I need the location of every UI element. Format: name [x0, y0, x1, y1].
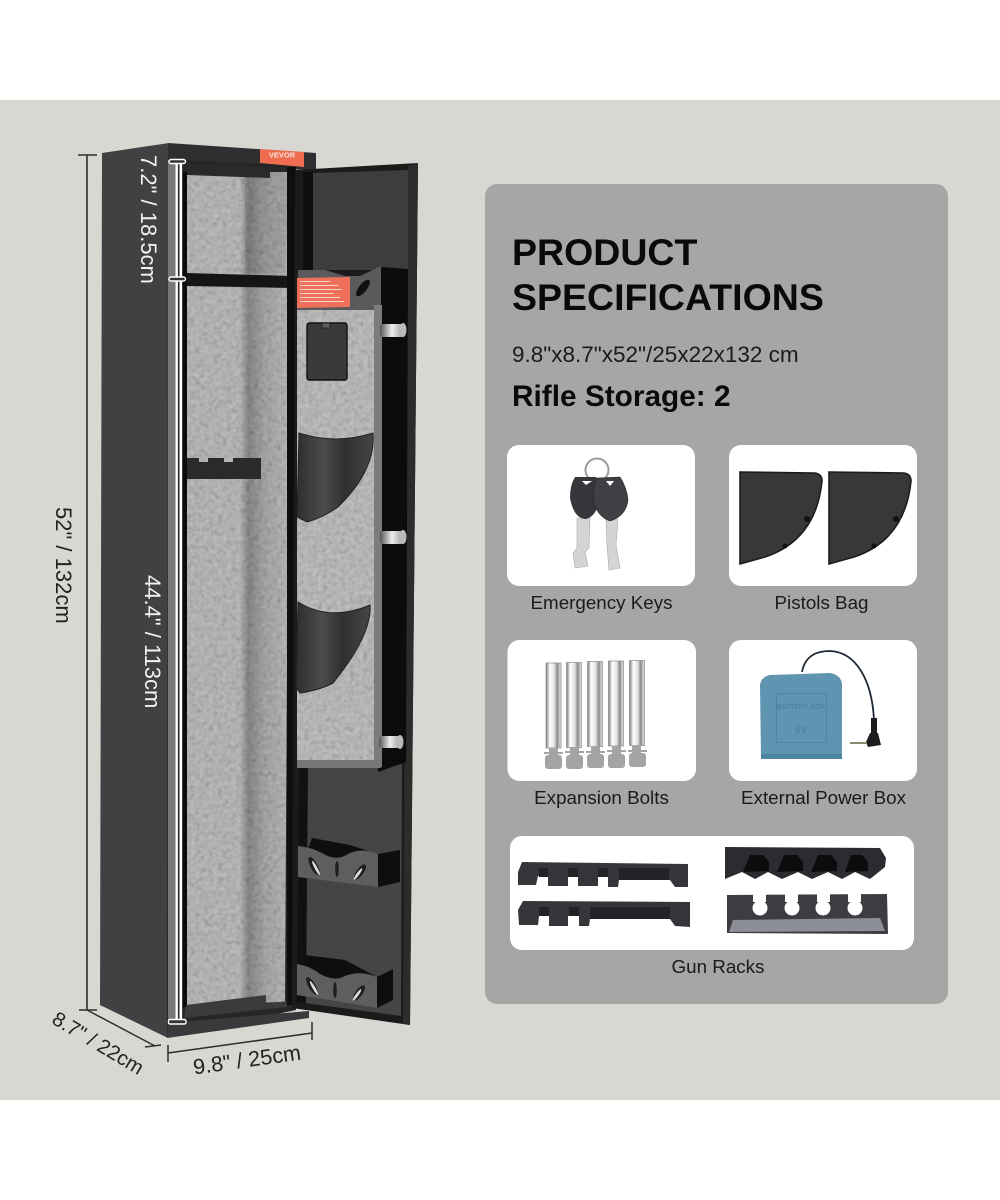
- icon: left racks: [518, 862, 690, 927]
- inner gun rack: [187, 458, 261, 479]
- white internal height bars: [168, 160, 186, 1024]
- dimension label: 52 inch: 52" / 132cm: [51, 507, 76, 624]
- label: Pistols Bag: [775, 592, 868, 613]
- pistols bag upper: [297, 433, 373, 522]
- door lower panel: [305, 764, 402, 1016]
- dimension label: 8.7 inch: 8.7" / 22cm: [48, 1008, 147, 1080]
- safe top front band: [168, 143, 316, 170]
- dimension label: 9.8 inch: 9.8" / 25cm: [191, 1040, 302, 1080]
- vent slot: [354, 278, 372, 298]
- icon: power box: [760, 651, 881, 759]
- card: pistols bag: [729, 445, 917, 613]
- icon: bolts: [544, 660, 647, 769]
- icon: keys: [570, 458, 628, 570]
- label: Expansion Bolts: [534, 787, 669, 808]
- open door: [292, 163, 418, 1025]
- base plate: [167, 1011, 309, 1038]
- pistols bag lower: [296, 602, 370, 693]
- bottom sill: [184, 995, 287, 1018]
- dimension: depth line: [87, 1010, 161, 1047]
- heading: PRODUCT: [512, 231, 698, 273]
- door gun holder lower: [297, 955, 393, 1008]
- orange VEVOR label: VEVOR: [269, 150, 296, 160]
- dimension: overall height line: [78, 155, 97, 1010]
- shelf: [187, 273, 291, 288]
- door bolts: [379, 323, 406, 749]
- panel: product specifications: [485, 184, 948, 1004]
- label: External Power Box: [741, 787, 907, 808]
- pistol panel right black box: [378, 267, 408, 772]
- pistol panel top: [297, 266, 381, 310]
- door gun holder upper: [298, 838, 400, 887]
- card: external power box: [729, 640, 917, 808]
- heading: [512, 231, 824, 318]
- icon: right racks: [725, 847, 888, 934]
- safe front frame: [167, 160, 296, 1038]
- top lip: [187, 164, 270, 178]
- door upper panel: [313, 170, 408, 270]
- icon: power box: 6V: [795, 725, 807, 736]
- rifle storage: Rifle Storage: 2: [512, 380, 731, 413]
- felt interior: [186, 172, 290, 1005]
- icon: bag pair: [740, 472, 911, 564]
- interior door-side edge: [287, 167, 296, 1005]
- felt door panel: [297, 310, 374, 761]
- label: Emergency Keys: [531, 592, 672, 613]
- label: Gun Racks: [672, 956, 764, 977]
- safe illustration: [100, 143, 418, 1038]
- pistol panel cover side: [374, 305, 382, 767]
- card: emergency keys: [507, 445, 695, 613]
- size text: 9.8"x8.7"x52"/25x22x132 cm: [512, 342, 799, 367]
- dimension label: 44.4 inch: 44.4" / 113cm: [140, 575, 165, 708]
- safe side panel: [100, 143, 169, 1038]
- card: expansion bolts: [508, 640, 696, 808]
- dimension label: 7.2 inch: 7.2" / 18.5cm: [136, 155, 161, 284]
- dimension: width line: [168, 1022, 312, 1062]
- heading: SPECIFICATIONS: [512, 276, 824, 318]
- icon: power box: BATTERY BOX: [777, 704, 825, 711]
- warning label: [297, 277, 350, 308]
- battery box: [307, 323, 347, 380]
- card: gun racks: [510, 836, 914, 977]
- orange VEVOR label: [260, 149, 304, 167]
